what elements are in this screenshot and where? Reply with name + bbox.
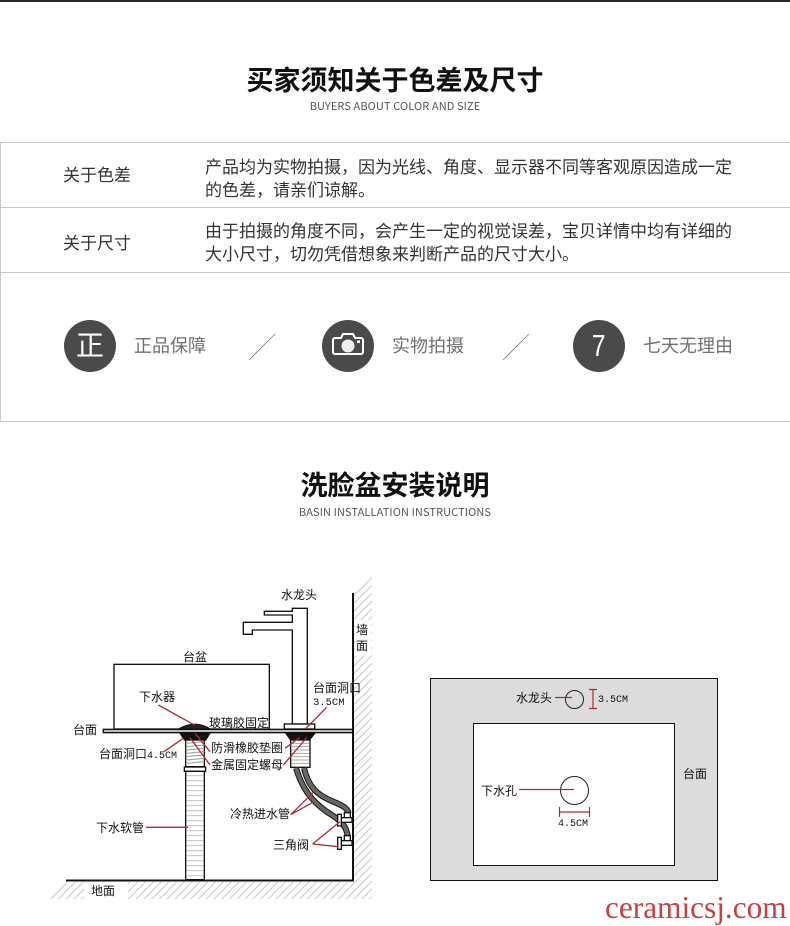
icon: slash two	[502, 334, 530, 360]
labels: side view: 3.5CM	[313, 697, 345, 709]
subtitle: buyer notice: BUYERS ABOUT COLOR AND SIZE	[310, 98, 480, 114]
label background patches	[84, 620, 371, 900]
labels: side view: 面	[356, 639, 368, 653]
text: colour difference: 的色差，请亲们谅解。	[205, 180, 375, 200]
label: size: 关于尺寸	[63, 234, 131, 253]
icon: seven days	[573, 320, 625, 372]
basin outline	[474, 724, 674, 866]
labels: top view: 下水孔	[481, 784, 517, 798]
labels: side view	[73, 588, 368, 898]
red dimension lines	[519, 690, 597, 817]
labels: top view: 水龙头	[516, 691, 552, 705]
counter top	[430, 678, 718, 880]
labels: side view: 地面	[91, 884, 115, 898]
angle valves	[338, 813, 352, 849]
counter	[103, 729, 353, 733]
text: size	[205, 222, 732, 264]
labels: side view: 水龙头	[281, 588, 317, 602]
labels: side view: 台面洞口	[313, 680, 361, 695]
wall and floor lines	[66, 593, 353, 880]
labels: top view	[481, 691, 707, 830]
labels: side view: 下水器	[139, 690, 175, 704]
panel: about colour difference	[0, 142, 790, 207]
labels: top view: 3.5CM	[598, 695, 628, 706]
labels: side view: 冷热进水管	[230, 806, 290, 821]
labels: side view: 金属固定螺母	[211, 757, 283, 772]
labels: side view: 台盆	[183, 649, 207, 664]
text: size: 由于拍摄的角度不同，会产生一定的视觉误差，宝贝详情中均有详细的	[205, 222, 732, 241]
faucet tailpiece	[286, 733, 315, 767]
icon: slash one	[248, 334, 276, 360]
drain hole	[560, 776, 588, 804]
labels: top view: 台面	[683, 766, 707, 781]
text: colour difference: 产品均为实物拍摄，因为光线、角度、显示器不同等客观原因造成一定	[205, 158, 732, 177]
icon: camera	[322, 320, 374, 372]
labels: side view: 三角阀	[273, 838, 309, 852]
title: installation: 洗脸盆安装说明	[300, 471, 490, 501]
panel: guarantees	[0, 272, 790, 422]
icon: genuine: 正	[76, 330, 104, 361]
faucet base	[284, 724, 315, 729]
basin	[114, 664, 269, 729]
labels: side view: 墙	[356, 623, 368, 637]
hoses	[296, 768, 349, 837]
text: size: 大小尺寸，切勿凭借想象来判断产品的尺寸大小。	[205, 244, 579, 264]
text: colour difference	[205, 158, 732, 200]
label: real photos: 实物拍摄	[392, 336, 464, 356]
drain	[178, 724, 211, 880]
icon: seven days: 7	[592, 328, 606, 363]
labels: side view: 台面洞口4.5CM	[99, 746, 177, 762]
label: seven days: 七天无理由	[643, 336, 733, 356]
faucet hole	[566, 690, 584, 708]
label: genuine: 正品保障	[134, 336, 206, 356]
red leader lines	[146, 705, 340, 847]
labels: side view: 防滑橡胶垫圈	[211, 740, 283, 755]
label: colour difference: 关于色差	[63, 166, 131, 185]
labels: side view: 玻璃胶固定	[209, 715, 269, 730]
hatching: wall and floor	[46, 573, 372, 899]
labels: top view: 4.5CM	[558, 819, 588, 830]
labels: side view: 下水软管	[96, 820, 144, 835]
watermark: ceramicsj.com	[605, 890, 787, 925]
title: buyer notice: 买家须知关于色差及尺寸	[246, 66, 544, 96]
top dark bar	[0, 0, 790, 2]
panel: about size	[0, 207, 790, 272]
faucet	[243, 608, 307, 724]
icon: genuine	[64, 320, 116, 372]
labels: side view: 台面	[73, 722, 97, 737]
subtitle: installation: BASIN INSTALLATION INSTRUCTIONS	[299, 504, 491, 520]
plumbing drawing	[103, 608, 353, 880]
